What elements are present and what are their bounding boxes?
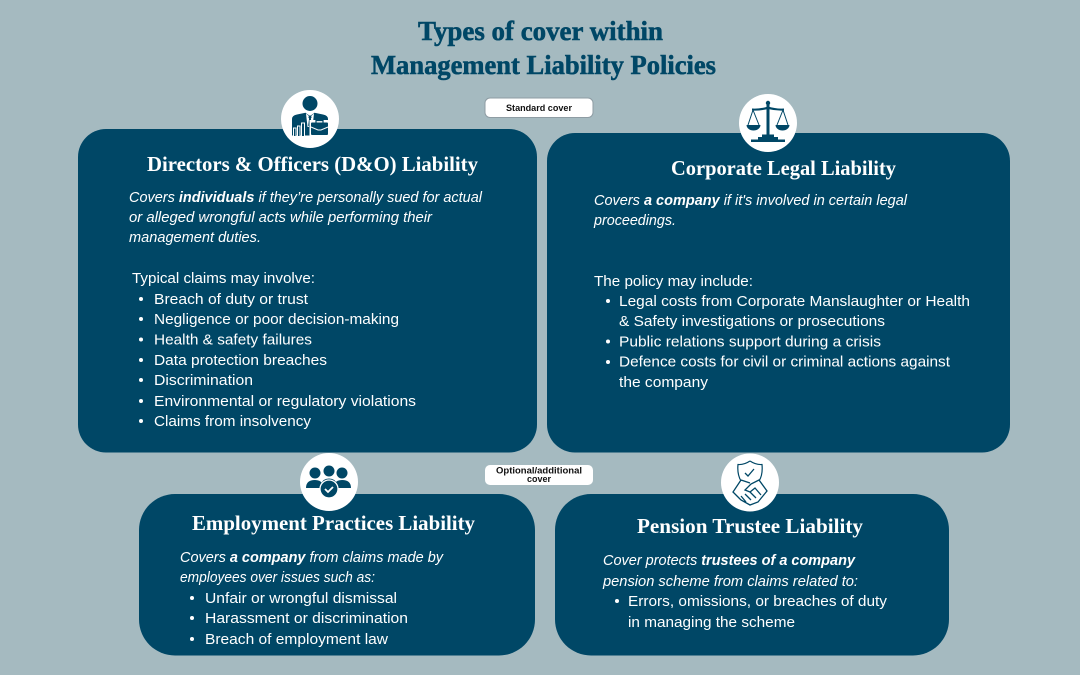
description: corporate legal xyxy=(593,192,908,229)
heading: corporate legal: Corporate Legal Liability xyxy=(671,156,896,180)
description: pension: pension scheme from claims related to: xyxy=(602,573,858,590)
legend label: standard cover: Standard cover xyxy=(506,103,572,113)
description: employment: employees over issues such as: xyxy=(180,569,375,586)
description: D&O xyxy=(129,189,483,246)
claims list: D&O: Typical claims may involve: xyxy=(132,270,315,287)
issues list: employment: Harassment or discrimination xyxy=(205,610,408,627)
icon: scales of justice xyxy=(739,94,797,152)
description: employment: Covers a company from claims made by xyxy=(180,549,444,566)
panel: Pension Trustee Liability xyxy=(555,494,949,656)
policy list: corporate legal: Defence costs for civil or criminal actions against xyxy=(619,354,951,370)
heading: employment: Employment Practices Liability xyxy=(192,511,475,535)
legend label: optional cover: Optional/additional xyxy=(496,466,582,476)
description: employment xyxy=(180,549,444,586)
description: D&O: Covers individuals if they’re personally sued for actual xyxy=(129,189,483,206)
legend label: optional cover xyxy=(485,465,593,485)
issues list: employment: Breach of employment law xyxy=(205,631,388,648)
heading: pension: Pension Trustee Liability xyxy=(637,514,863,538)
description: pension: Cover protects trustees of a company xyxy=(603,552,856,569)
claims list: D&O xyxy=(132,270,416,430)
policy list: corporate legal: Public relations support during a crisis xyxy=(619,334,881,350)
description: D&O: or alleged wrongful acts while performing their xyxy=(129,209,433,226)
icon: team with check badge xyxy=(300,453,358,511)
panel: Directors & Officers Liability xyxy=(78,129,537,452)
description: D&O: management duties. xyxy=(129,229,261,246)
legend label: optional cover: cover xyxy=(527,474,551,484)
icon: businessman with briefcase xyxy=(281,90,339,148)
panel: Employment Practices Liability xyxy=(139,494,535,656)
issues list: employment: Unfair or wrongful dismissal xyxy=(205,590,397,607)
policy list: corporate legal: & Safety investigations or prosecutions xyxy=(619,313,885,330)
policy list: corporate legal: The policy may include: xyxy=(594,273,753,290)
title xyxy=(371,16,716,80)
claims list: D&O: Negligence or poor decision-making xyxy=(154,311,399,328)
claims list: D&O: Environmental or regulatory violations xyxy=(154,393,416,410)
issues list: pension: Errors, omissions, or breaches of duty xyxy=(628,593,888,610)
claims list: D&O: Breach of duty or trust xyxy=(154,291,309,308)
title: Types of cover within xyxy=(418,16,663,46)
claims list: D&O: Discrimination xyxy=(154,372,253,389)
claims list: D&O: Claims from insolvency xyxy=(154,413,311,430)
policy list: corporate legal: Legal costs from Corporate Manslaughter or Health xyxy=(619,293,970,310)
heading: D&O: Directors & Officers (D&O) Liability xyxy=(147,152,478,176)
title: Management Liability Policies xyxy=(371,50,716,80)
description: corporate legal: Covers a company if it's involved in certain legal xyxy=(594,192,908,209)
issues list: pension xyxy=(615,593,888,631)
panel: Corporate Legal Liability xyxy=(547,133,1010,452)
issues list: employment xyxy=(190,590,408,648)
claims list: D&O: Health & safety failures xyxy=(154,332,312,348)
icon: shield with handshake xyxy=(721,454,779,512)
description: pension xyxy=(602,552,858,590)
legend label: standard cover xyxy=(485,98,593,118)
description: corporate legal: proceedings. xyxy=(593,212,676,229)
policy list: corporate legal: the company xyxy=(619,374,709,391)
claims list: D&O: Data protection breaches xyxy=(154,352,327,369)
issues list: pension: in managing the scheme xyxy=(628,614,795,631)
policy list: corporate legal xyxy=(594,273,970,391)
